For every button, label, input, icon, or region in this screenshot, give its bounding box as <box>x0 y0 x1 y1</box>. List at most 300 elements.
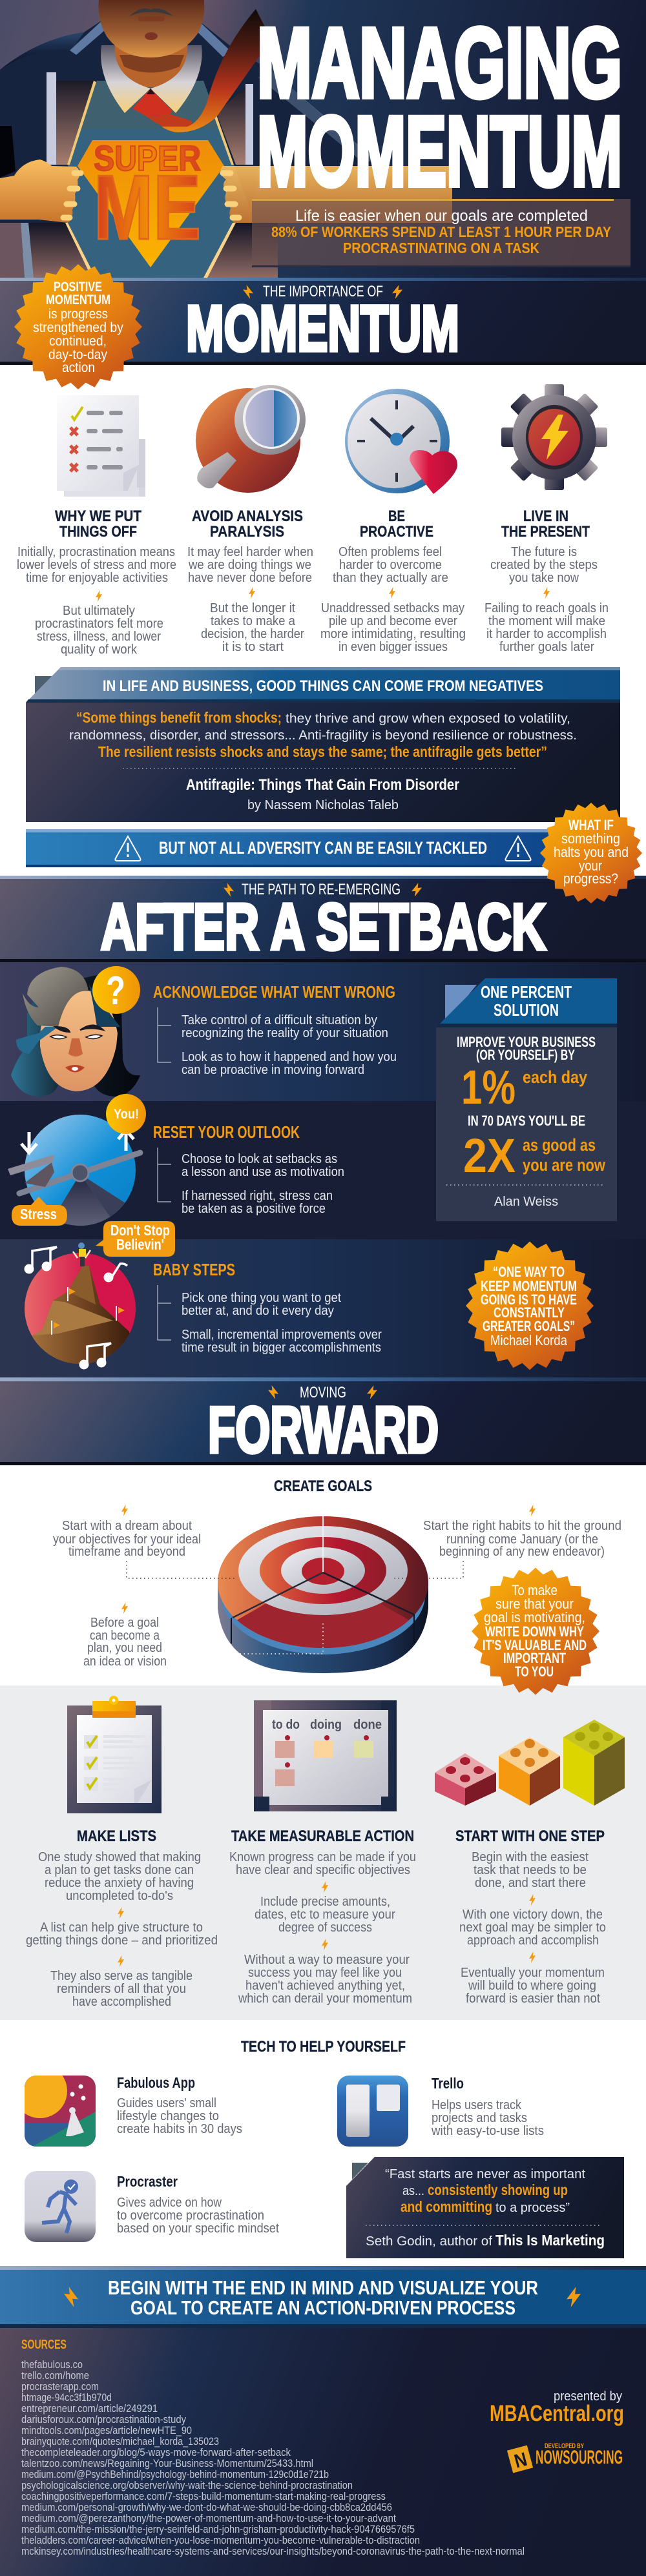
column: avoid analysis paralysis <box>187 385 313 654</box>
panel heading <box>481 982 572 1020</box>
illustration: mountain <box>19 1221 175 1369</box>
text block <box>26 1921 218 1948</box>
sources list: dariusforoux.com/procrastination-study <box>21 2414 187 2426</box>
icon: bolt <box>268 1385 278 1399</box>
icon: bolt <box>543 587 550 599</box>
book title: Antifragile: Things That Gain From Disorder <box>186 776 459 794</box>
heading: BABY STEPS <box>153 1260 235 1279</box>
quote: randomness, disorder, and stressors... Anti-fragility is beyond resilience or robustness. <box>69 728 577 743</box>
badge: what if: progress? <box>563 871 618 887</box>
text block: pile up and become ever <box>329 614 457 628</box>
text block: quality of work <box>61 643 138 657</box>
quote: as... <box>402 2184 424 2198</box>
illustration: seesaw <box>8 1094 146 1226</box>
icon: bolt <box>392 285 402 299</box>
stat: two x: 2X <box>463 1129 516 1182</box>
text block: dates, etc to measure your <box>255 1908 395 1922</box>
text: start the right habits: running come January (or the <box>446 1532 598 1547</box>
sources list: medium.com/@perezanthony/the-power-of-momentum-and-how-to-use-it-to-your-advant <box>21 2513 396 2524</box>
text: before a goal: plan, you need <box>87 1641 162 1655</box>
heading: ACKNOWLEDGE WHAT WENT WRONG <box>153 982 395 1002</box>
icon: bolt <box>389 587 395 599</box>
sources list: medium.com/the-mission/the-jerry-seinfeld-and-john-grisham-productivity-hack-9047669576f5 <box>21 2524 415 2535</box>
text block: Initially, procrastination means <box>17 545 175 559</box>
text block <box>201 601 304 654</box>
badge: positive momentum: strengthened by <box>33 320 123 335</box>
text block: have never done before <box>188 571 312 585</box>
badge: motivating goal: IMPORTANT <box>503 1650 566 1666</box>
text block: One study showed that making <box>38 1850 201 1864</box>
attribution: Alan Weiss <box>494 1195 558 1209</box>
heading <box>192 508 303 541</box>
text: before a goal: can become a <box>90 1629 160 1643</box>
text: start the right habits: beginning of any new endeavor) <box>439 1545 605 1559</box>
text: start with a dream <box>53 1519 201 1559</box>
callout: question mark: ? <box>106 969 125 1013</box>
quote: they thrive and grow when exposed to volatility, <box>286 712 570 726</box>
heading: FORWARD <box>208 1394 439 1467</box>
icon: bolt <box>567 2287 581 2307</box>
icon: bolt <box>322 1939 328 1950</box>
badge: positive momentum: continued, <box>49 334 107 349</box>
app: trello: with easy-to-use lists <box>431 2124 544 2138</box>
app: procraster: to overcome procrastination <box>117 2209 264 2223</box>
app: procraster <box>25 2171 279 2242</box>
text block: success you may feel like you <box>248 1966 402 1980</box>
text block <box>182 1291 382 1355</box>
illustration: superhero businessman: SUPER <box>94 138 201 178</box>
text block: A list can help give structure to <box>40 1921 203 1935</box>
app: trello: Trello <box>432 2075 464 2092</box>
text block: have clear and specific objectives <box>236 1863 410 1877</box>
badge: michael korda quote: GOING IS TO HAVE <box>481 1292 577 1308</box>
section: create goals <box>53 1478 621 1673</box>
text block: Include precise amounts, <box>260 1895 390 1909</box>
logo: nowsourcing: N <box>512 2449 530 2473</box>
text block: procrastinators felt more <box>35 617 163 631</box>
heading: TAKE MEASURABLE ACTION <box>231 1828 414 1845</box>
text block: But ultimately <box>63 604 135 618</box>
illustration: woman <box>11 966 140 1097</box>
badge: michael korda quote: KEEP MOMENTUM <box>481 1278 577 1294</box>
sources list: medium.com/@PsychBehind/psychology-behind-momentum-129c0d1e721b <box>21 2469 329 2480</box>
icon: kanban board: to do <box>272 1718 300 1732</box>
text block: time result in bigger accomplishments <box>182 1341 381 1355</box>
text block: degree of success <box>278 1921 372 1935</box>
text: start the right habits <box>423 1519 621 1559</box>
logo: nowsourcing <box>507 2442 623 2473</box>
heading: CREATE GOALS <box>274 1478 372 1495</box>
illustration: superhero businessman <box>0 0 452 278</box>
icon: bolt <box>249 587 255 599</box>
icon: building blocks <box>435 1720 625 1806</box>
text: (OR YOURSELF) BY <box>476 1047 575 1063</box>
text block <box>187 545 313 585</box>
heading: BE <box>388 508 405 525</box>
text: IMPROVE YOUR BUSINESS <box>457 1034 596 1050</box>
app: fabulous <box>25 2076 242 2147</box>
text block: getting things done – and prioritized <box>26 1933 218 1948</box>
text block: than they actually are <box>333 571 448 585</box>
text block: next goal may be simpler to <box>459 1921 606 1935</box>
icon: procraster <box>25 2171 96 2242</box>
callout: you: You! <box>114 1107 139 1122</box>
badge: michael korda quote: CONSTANTLY <box>494 1304 565 1321</box>
section: setback steps background <box>0 962 646 1377</box>
text block: better at, and do it every day <box>182 1304 334 1318</box>
heading: THINGS OFF <box>59 523 137 541</box>
text block: can be proactive in moving forward <box>182 1063 364 1077</box>
heading: START WITH ONE STEP <box>455 1828 605 1845</box>
badge: positive momentum: day-to-day <box>48 347 107 362</box>
heading: PROACTIVE <box>360 523 433 541</box>
icon: bolt <box>367 1385 377 1399</box>
text block: a lesson and use as motivation <box>182 1165 344 1179</box>
text block: uncompleted to-do's <box>66 1889 173 1903</box>
column: take measurable action <box>229 1700 416 2006</box>
badge: michael korda quote: GREATER GOALS” <box>483 1318 575 1334</box>
sources list: theladders.com/career-advice/when-you-lose-momentum-you-become-vulnerable-to-distraction <box>21 2535 420 2546</box>
heading: LIVE IN <box>523 508 568 525</box>
kicker: THE IMPORTANCE OF <box>263 283 383 300</box>
section: importance of momentum <box>0 278 646 365</box>
heading: MAKE LISTS <box>77 1828 156 1845</box>
badge: what if <box>540 803 642 903</box>
text block <box>182 1013 397 1077</box>
text block: in even bigger issues <box>339 640 448 654</box>
text: IN 70 DAYS YOU'LL BE <box>468 1113 585 1129</box>
icon: bolt <box>243 285 253 299</box>
stat: one percent <box>461 1060 587 1114</box>
text block: haven't achieved anything yet, <box>245 1979 405 1993</box>
sources list: thefabulous.co <box>21 2359 83 2371</box>
text block <box>50 1969 193 2009</box>
badge: motivating goal: TO YOU <box>515 1664 554 1680</box>
badge: positive momentum: is progress <box>48 307 108 322</box>
banner: adversity warning <box>26 829 581 867</box>
sources list: htmage-94cc3f1b970d <box>21 2392 112 2404</box>
icon: bolt <box>412 883 422 897</box>
sources list: mckinsey.com/industries/healthcare-systems-and-services/our-insights/beyond-coronavirus-the-path-to-the-next-normal <box>21 2546 525 2557</box>
sources list <box>21 2359 525 2557</box>
app: trello: Helps users track <box>432 2098 522 2112</box>
text block: With one victory down, the <box>463 1908 603 1922</box>
icon: kanban board <box>254 1700 397 1811</box>
badge: motivating goal: sure that your <box>495 1596 574 1612</box>
text block: Begin with the easiest <box>472 1850 589 1864</box>
sources list: entrepreneur.com/article/249291 <box>21 2403 158 2415</box>
text block: recognizing the reality of your situation <box>182 1026 388 1040</box>
stat: one percent: each day <box>523 1067 587 1087</box>
stat: one percent: 1% <box>461 1060 516 1114</box>
text block: reminders of all that you <box>57 1982 186 1996</box>
text block <box>459 1908 606 1948</box>
text block <box>461 1966 605 2006</box>
sources list: coachingpositiveperformance.com/7-steps-build-momentum-start-making-real-progress <box>21 2491 386 2502</box>
text block <box>490 545 598 585</box>
text: start with a dream: Start with a dream about <box>62 1519 192 1533</box>
text block: more intimidating, resulting <box>320 627 466 641</box>
text <box>457 1034 596 1063</box>
title <box>257 8 622 207</box>
text block: It may feel harder when <box>187 545 313 559</box>
banner: adversity warning: BUT NOT ALL ADVERSITY CAN BE EASILY TACKLED <box>159 838 487 858</box>
subtitle text: Life is easier when our goals are completed <box>295 207 588 225</box>
column: start with one step <box>435 1720 625 2006</box>
text block: If harnessed right, stress can <box>182 1189 333 1203</box>
icon: fabulous <box>25 2076 96 2147</box>
badge: positive momentum: POSITIVE <box>54 280 102 294</box>
app: procraster: Procraster <box>117 2173 178 2190</box>
kicker: THE PATH TO RE-EMERGING <box>242 881 401 898</box>
heading <box>360 508 433 541</box>
text block: the moment will make <box>488 614 605 628</box>
text block: forward is easier than not <box>466 1992 600 2006</box>
badge: michael korda quote <box>466 1241 594 1370</box>
app: trello: projects and tasks <box>432 2111 527 2125</box>
badge: what if: your <box>579 858 602 874</box>
app: fabulous: lifestyle changes to <box>117 2109 219 2123</box>
badge: what if: WHAT IF <box>568 817 614 833</box>
icon: bolt <box>121 1505 128 1516</box>
text block: created by the steps <box>490 558 598 572</box>
banner text <box>108 2276 538 2319</box>
app: fabulous: Guides users' small <box>117 2096 216 2110</box>
quote <box>69 709 577 760</box>
quote: consistently showing up <box>428 2181 568 2198</box>
text block: Without a way to measure your <box>244 1953 410 1967</box>
sources list: brainyquote.com/quotes/michael_korda_135023 <box>21 2436 219 2447</box>
heading <box>55 508 141 541</box>
banner text: BEGIN WITH THE END IN MIND AND VISUALIZE YOUR <box>108 2276 538 2299</box>
text block: Pick one thing you want to get <box>182 1291 341 1305</box>
app: fabulous: Fabulous App <box>117 2074 195 2091</box>
icon: bolt <box>96 590 102 602</box>
text block: it harder to accomplish <box>486 627 607 641</box>
panel: one percent solution <box>436 978 617 1221</box>
author: by Nassem Nicholas Taleb <box>247 798 399 812</box>
step: reset your outlook <box>8 1094 344 1226</box>
icon: trello <box>337 2076 408 2147</box>
text block: But the longer it <box>210 601 295 615</box>
badge: michael korda quote: “ONE WAY TO <box>493 1264 565 1280</box>
heading: PARALYSIS <box>210 523 284 541</box>
banner: begin with the end in mind <box>0 2266 646 2328</box>
attribution <box>366 2232 605 2249</box>
icon: kanban board: doing <box>310 1718 342 1732</box>
quote: “Some things benefit from shocks; <box>76 709 282 726</box>
app: procraster: based on your specific mindset <box>117 2221 279 2236</box>
badge: what if: something <box>561 830 620 847</box>
badge: what if: halts you and <box>554 844 629 860</box>
icon: bolt <box>64 2287 78 2307</box>
sources list: procrasterapp.com <box>21 2381 99 2393</box>
text block <box>238 1953 412 2006</box>
icon: bolt <box>118 1907 124 1919</box>
heading: WHY WE PUT <box>55 508 141 525</box>
text block <box>255 1895 395 1935</box>
text: before a goal: an idea or vision <box>83 1654 167 1669</box>
icon: kanban board: done <box>353 1718 382 1732</box>
column: be proactive <box>320 389 466 654</box>
text block: reduce the anxiety of having <box>45 1876 194 1890</box>
icon: bolt <box>224 883 234 897</box>
panel heading: SOLUTION <box>494 1000 559 1020</box>
stat: two x: you are now <box>523 1155 606 1175</box>
text block: Eventually your momentum <box>461 1966 605 1980</box>
section: after a setback header <box>0 876 646 963</box>
text block: a plan to get tasks done can <box>45 1863 194 1877</box>
icon: bolt <box>529 1894 536 1906</box>
badge: motivating goal <box>472 1568 599 1695</box>
badge: positive momentum: action <box>62 360 95 375</box>
text block: lower levels of stress and more <box>17 558 176 572</box>
text block: it is to start <box>222 640 284 654</box>
text block <box>182 1152 344 1216</box>
statistic <box>271 223 611 256</box>
icon: checklist paper <box>57 395 145 497</box>
heading: TECH TO HELP YOURSELF <box>241 2038 406 2056</box>
text block: be taken as a positive force <box>182 1202 326 1216</box>
panel heading: ONE PERCENT <box>481 982 572 1002</box>
sources heading: SOURCES <box>21 2338 67 2352</box>
text block: Often problems feel <box>339 545 442 559</box>
hero panel <box>0 0 646 278</box>
icon: magnifying glass <box>196 385 306 493</box>
icon: gear with bolt <box>501 384 607 490</box>
attribution: Seth Godin, author of <box>366 2234 492 2249</box>
sources list: medium.com/personal-growth/why-we-dont-do-what-we-should-be-doing-cbb8ca2dd456 <box>21 2502 392 2513</box>
icon: bolt <box>529 1952 536 1963</box>
callout: dont stop believin <box>96 1221 175 1257</box>
illustration: target <box>213 1516 433 1673</box>
text: start with a dream: your objectives for your ideal <box>53 1532 201 1547</box>
presented by: presented by <box>554 2389 622 2404</box>
attribution: This Is Marketing <box>495 2232 605 2249</box>
panel: seth godin quote <box>346 2157 624 2258</box>
text block <box>35 604 163 657</box>
icon: bolt <box>121 1602 128 1614</box>
text block: you take now <box>509 571 579 585</box>
text block <box>17 545 176 585</box>
badge: motivating goal: To make <box>512 1582 557 1598</box>
icon: clipboard <box>67 1696 162 1813</box>
text block: stress, illness, and lower <box>37 630 161 644</box>
section: footer <box>0 2328 646 2576</box>
heading: AVOID ANALYSIS <box>192 508 303 525</box>
stat: two x <box>463 1129 606 1182</box>
text block <box>472 1850 589 1890</box>
sources list: trello.com/home <box>21 2370 89 2382</box>
banner text: GOAL TO CREATE AN ACTION-DRIVEN PROCESS <box>130 2296 516 2319</box>
section: gray actions panel <box>0 1685 646 2020</box>
text block: Take control of a difficult situation by <box>182 1013 377 1027</box>
panel: antifragile quote <box>26 667 620 822</box>
text block <box>484 601 609 654</box>
step: baby steps <box>19 1221 382 1369</box>
icon: bolt <box>529 1505 536 1516</box>
quote <box>385 2167 585 2215</box>
callout: stress <box>12 1197 67 1226</box>
text block: further goals later <box>499 640 594 654</box>
text block <box>229 1850 416 1877</box>
text block: task that needs to be <box>474 1863 587 1877</box>
column: make lists <box>26 1696 218 2009</box>
text block: decision, the harder <box>201 627 304 641</box>
sources list: mindtools.com/pages/article/newHTE_90 <box>21 2425 192 2437</box>
sources list: talentzoo.com/news/Regaining-Your-Business-Momentum/25433.html <box>21 2458 313 2469</box>
text: before a goal: Before a goal <box>90 1616 159 1630</box>
text block: takes to make a <box>211 614 296 628</box>
text: start with a dream: timeframe and beyond <box>68 1545 185 1559</box>
callout: dont stop believin: Believin' <box>116 1236 164 1253</box>
text block: harder to overcome <box>339 558 442 572</box>
text block <box>333 545 448 585</box>
banner heading <box>26 667 620 703</box>
text block: Unaddressed setbacks may <box>321 601 464 615</box>
badge: motivating goal: WRITE DOWN WHY <box>485 1623 584 1640</box>
text block: time for enjoyable activities <box>26 571 168 585</box>
text: start the right habits: Start the right habits to hit the ground <box>423 1519 621 1533</box>
text block <box>38 1850 201 1903</box>
app: fabulous: create habits in 30 days <box>117 2122 242 2136</box>
text block: have accomplished <box>72 1995 171 2009</box>
text block <box>320 601 466 654</box>
quote: “Fast starts are never as important <box>385 2167 585 2181</box>
app: procraster: Gives advice on how <box>117 2196 222 2210</box>
section: tech to help yourself <box>13 2038 624 2258</box>
banner heading: IN LIFE AND BUSINESS, GOOD THINGS CAN COME FROM NEGATIVES <box>103 677 543 695</box>
column: live in the present <box>484 384 609 654</box>
callout: stress: Stress <box>20 1206 57 1222</box>
statistic: PROCRASTINATING ON A TASK <box>343 240 539 256</box>
quote: The resilient resists shocks and stays the same; the antifragile gets better” <box>98 743 547 760</box>
text block: we are doing things we <box>188 558 311 572</box>
stat: two x: as good as <box>523 1135 596 1155</box>
text block: Choose to look at setbacks as <box>182 1152 337 1166</box>
kicker: MOVING <box>300 1384 346 1401</box>
badge: michael korda quote: Michael Korda <box>490 1332 568 1348</box>
callout: dont stop believin: Don't Stop <box>110 1222 170 1239</box>
text block: Small, incremental improvements over <box>182 1328 382 1342</box>
icon: bolt <box>322 1881 328 1893</box>
icon: clock with heart <box>345 389 457 494</box>
quote: and committing <box>401 2198 492 2215</box>
badge: positive momentum: MOMENTUM <box>46 293 110 307</box>
text block: done, and start there <box>475 1876 586 1890</box>
sources list: thecompleteleader.org/blog/5-ways-move-forward-after-setback <box>21 2447 291 2458</box>
callout: you <box>106 1094 146 1134</box>
text block: approach and accomplish <box>467 1933 599 1948</box>
icon: warning <box>505 836 531 861</box>
text block: which can derail your momentum <box>238 1992 412 2006</box>
badge: motivating goal: IT'S VALUABLE AND <box>483 1637 587 1653</box>
callout: question mark <box>92 966 140 1014</box>
badge: motivating goal: goal is motivating, <box>484 1609 585 1625</box>
text block: The future is <box>511 545 577 559</box>
column: why we put things off <box>17 395 176 657</box>
app: trello <box>337 2075 544 2147</box>
sources list: psychologicalscience.org/observer/why-wait-the-science-behind-procrastination <box>21 2480 353 2491</box>
heading: RESET YOUR OUTLOOK <box>153 1122 300 1142</box>
logo: nowsourcing: DEVELOPED BY <box>545 2442 584 2450</box>
subtitle panel <box>252 199 630 267</box>
illustration: superhero businessman: ME <box>94 156 201 259</box>
icon: warning <box>115 836 141 861</box>
text: before a goal <box>83 1616 167 1669</box>
text block: They also serve as tangible <box>50 1969 193 1983</box>
step: acknowledge what went wrong <box>11 966 397 1097</box>
